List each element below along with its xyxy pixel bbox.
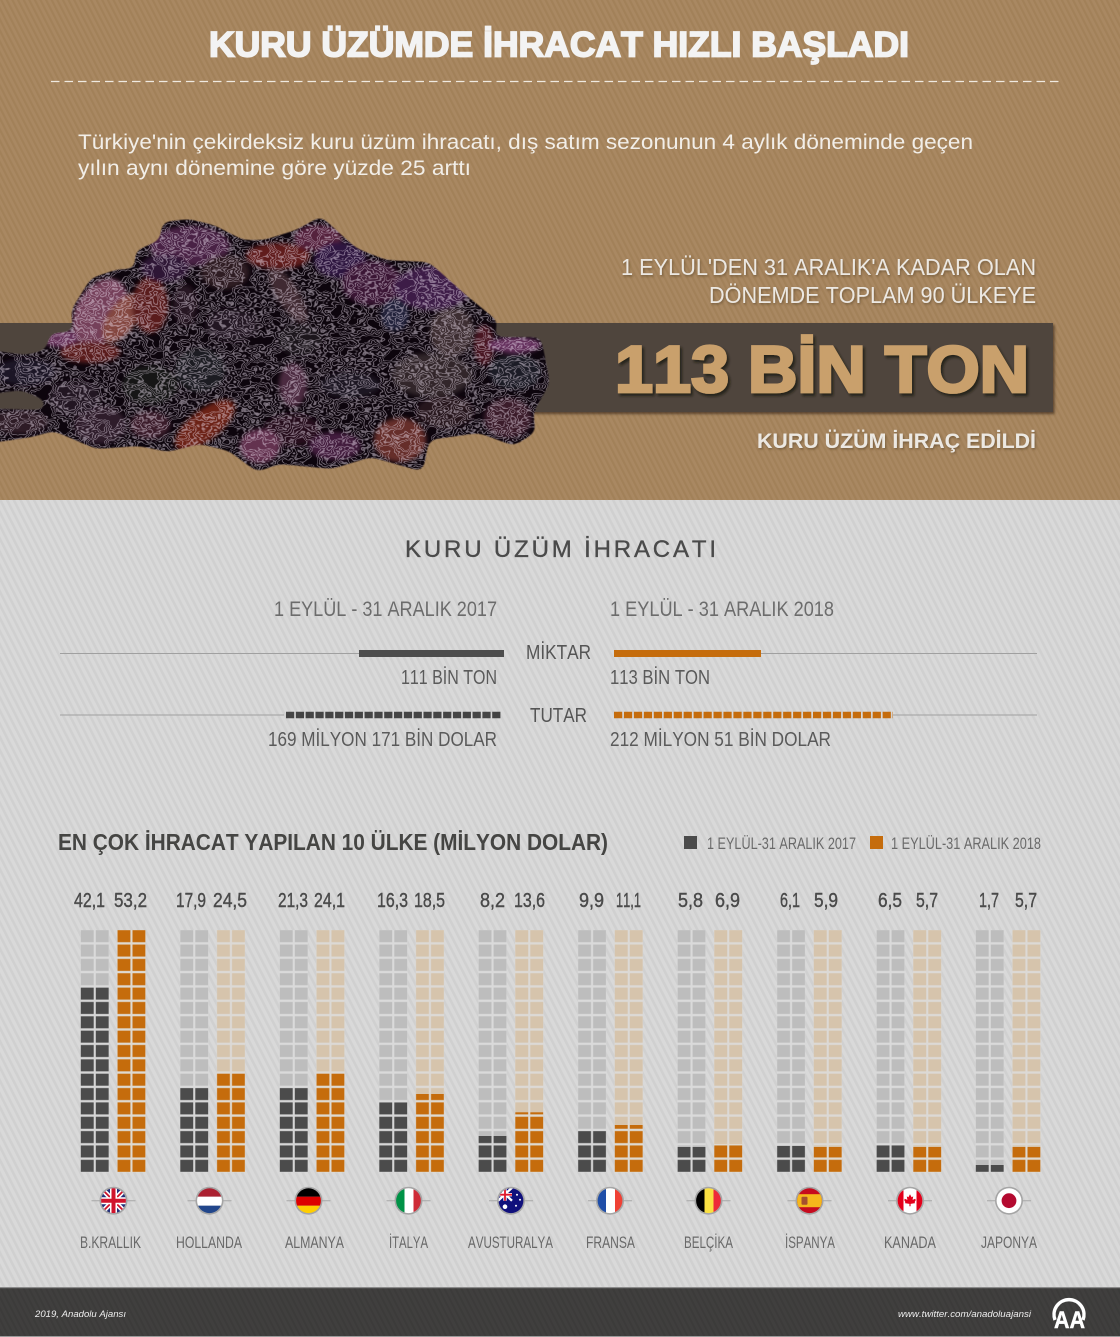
flag: Spain — [788, 1187, 832, 1215]
country labels: AVUSTURALYA — [468, 1233, 553, 1252]
bars: Fransa — [578, 930, 643, 1172]
section heading: KURU ÜZÜM İHRACATI — [405, 536, 716, 563]
chart values: 6,9 — [715, 890, 740, 912]
country labels: HOLLANDA — [176, 1233, 242, 1252]
country labels: B.KRALLIK — [80, 1233, 141, 1252]
bars: Avusturalya — [478, 930, 543, 1172]
chart values: 21,3 — [278, 890, 308, 912]
callout text: period and countries: DÖNEMDE TOPLAM 90 ÜLKEYE — [709, 282, 1036, 308]
footer bar: 2019, Anadolu Ajansı — [34, 1309, 126, 1320]
comparison row: quantity: MİKTAR — [526, 641, 591, 664]
illustration: raisin pile — [0, 210, 560, 480]
bars: Kanada — [876, 930, 941, 1172]
flag: Japan — [987, 1187, 1031, 1215]
country labels: FRANSA — [586, 1233, 635, 1252]
chart values: 53,2 — [114, 890, 147, 912]
comparison: period labels — [274, 598, 834, 621]
chart values: 5,7 — [916, 890, 938, 912]
chart values: 6,5 — [878, 890, 902, 912]
chart legend — [684, 834, 1041, 853]
bars: İtalya — [379, 930, 444, 1172]
flag: United Kingdom — [92, 1187, 136, 1215]
bars: Belçika — [677, 930, 742, 1172]
chart values: 6,1 — [780, 890, 800, 912]
bars: Hollanda — [180, 930, 245, 1172]
panel: brown header background — [0, 0, 1120, 500]
flag: Belgium — [686, 1187, 730, 1215]
chart values: 5,7 — [1015, 890, 1037, 912]
flag: Canada — [888, 1187, 932, 1215]
country labels — [80, 1233, 1037, 1252]
callout band — [0, 323, 1053, 412]
flag: Germany — [286, 1187, 330, 1215]
chart values: 11,1 — [616, 890, 641, 912]
comparison row: quantity: 111 BİN TON — [401, 666, 497, 689]
callout big number: 113 BİN TON — [615, 332, 1029, 406]
chart values: 24,5 — [213, 890, 247, 912]
country labels: İTALYA — [389, 1233, 428, 1252]
chart legend: 1 EYLÜL-31 ARALIK 2017 — [707, 834, 856, 853]
flag: Australia — [489, 1187, 533, 1215]
bars: Japonya — [976, 930, 1041, 1172]
chart values: 1,7 — [979, 890, 999, 912]
chart values: 5,9 — [814, 890, 838, 912]
chart values: 9,9 — [579, 890, 604, 912]
comparison row: value: 169 MİLYON 171 BİN DOLAR — [268, 728, 497, 751]
comparison: period labels: 1 EYLÜL - 31 ARALIK 2017 — [274, 598, 497, 621]
icon: Anadolu Agency logo: AA — [1054, 1307, 1085, 1334]
chart values: 13,6 — [514, 890, 545, 912]
callout text: period and countries: 1 EYLÜL'DEN 31 ARALIK'A KADAR OLAN — [621, 254, 1036, 280]
footer bar — [0, 1287, 1120, 1337]
title: KURU ÜZÜMDE İHRACAT HIZLI BAŞLADI — [209, 26, 909, 64]
comparison row: quantity: 113 BİN TON — [610, 666, 710, 689]
chart values: 17,9 — [176, 890, 206, 912]
country labels: JAPONYA — [981, 1233, 1037, 1252]
comparison: period labels: 1 EYLÜL - 31 ARALIK 2018 — [610, 598, 834, 621]
comparison row: quantity — [60, 641, 1037, 689]
intro text — [78, 131, 973, 180]
chart values: 16,3 — [377, 890, 408, 912]
country labels: ALMANYA — [285, 1233, 344, 1252]
chart values: 24,1 — [314, 890, 345, 912]
footer bar: www.twitter.com/anadoluajansi — [898, 1309, 1032, 1320]
intro text: yılın aynı dönemine göre yüzde 25 arttı — [78, 157, 471, 180]
callout text: period and countries — [621, 254, 1036, 308]
chart values: 5,8 — [678, 890, 703, 912]
intro text: Türkiye'nin çekirdeksiz kuru üzüm ihracatı, dış satım sezonunun 4 aylık döneminde geçen — [78, 131, 973, 154]
bars: B.Krallık — [80, 930, 146, 1172]
comparison row: value — [60, 705, 1037, 751]
chart values: 8,2 — [480, 890, 505, 912]
flag: France — [588, 1187, 632, 1215]
bars: Almanya — [280, 930, 345, 1172]
bars: İspanya — [777, 930, 842, 1172]
panel: grey content background — [0, 500, 1120, 1288]
chart values — [74, 890, 1037, 912]
chart legend: 1 EYLÜL-31 ARALIK 2018 — [891, 834, 1041, 853]
chart values: 18,5 — [414, 890, 445, 912]
flag: Netherlands — [188, 1187, 232, 1215]
country labels: BELÇİKA — [684, 1233, 733, 1252]
flag: Italy — [386, 1187, 430, 1215]
chart heading: EN ÇOK İHRACAT YAPILAN 10 ÜLKE (MİLYON DOLAR) — [58, 829, 608, 855]
comparison row: value: 212 MİLYON 51 BİN DOLAR — [610, 728, 831, 751]
country labels: KANADA — [884, 1233, 936, 1252]
comparison row: value: TUTAR — [530, 705, 587, 727]
chart values: 42,1 — [74, 890, 105, 912]
country labels: İSPANYA — [785, 1233, 835, 1252]
callout caption: KURU ÜZÜM İHRAÇ EDİLDİ — [757, 430, 1036, 453]
